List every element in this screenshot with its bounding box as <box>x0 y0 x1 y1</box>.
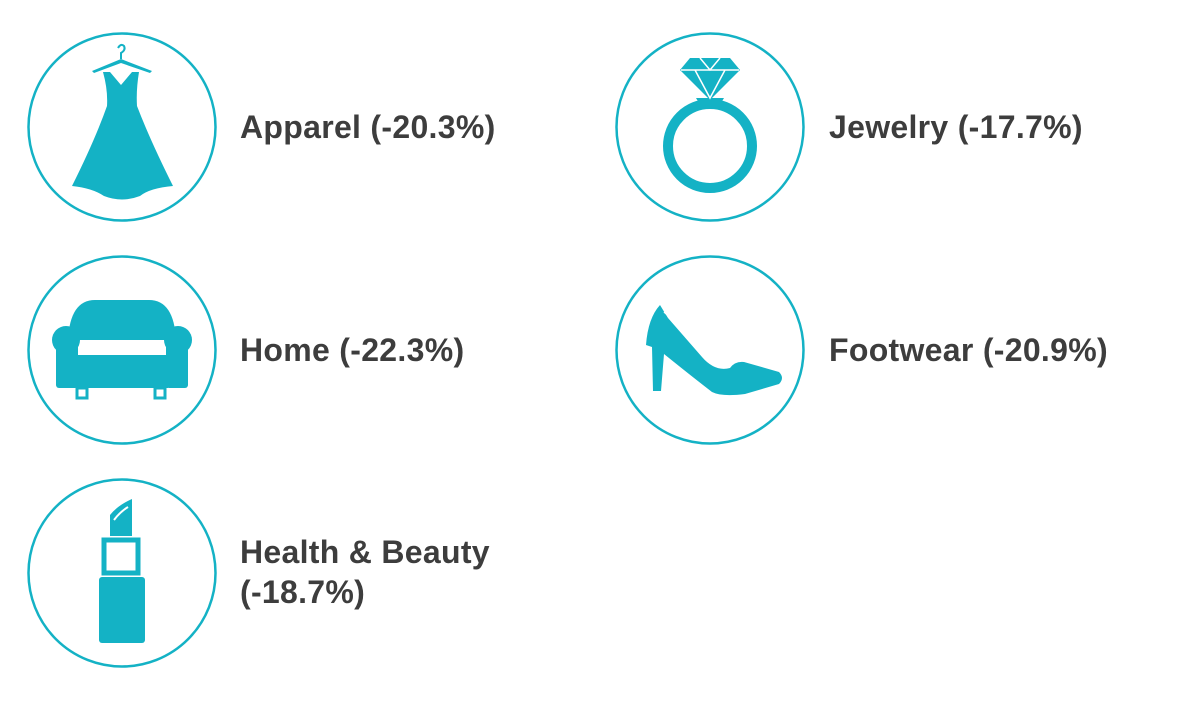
label: health & beauty: (-18.7%) <box>240 574 365 610</box>
icon: shoe <box>616 256 804 444</box>
label: health & beauty: Health & Beauty <box>240 534 490 570</box>
icon: sofa <box>28 256 216 444</box>
label: health & beauty <box>240 534 490 610</box>
label: home: Home (-22.3%) <box>240 332 464 368</box>
icon: lipstick <box>28 480 216 666</box>
icon: dress <box>28 34 216 220</box>
label: apparel: Apparel (-20.3%) <box>240 109 496 145</box>
label: footwear: Footwear (-20.9%) <box>829 332 1108 368</box>
icon: ring <box>616 34 804 220</box>
label: jewelry: Jewelry (-17.7%) <box>829 109 1083 145</box>
